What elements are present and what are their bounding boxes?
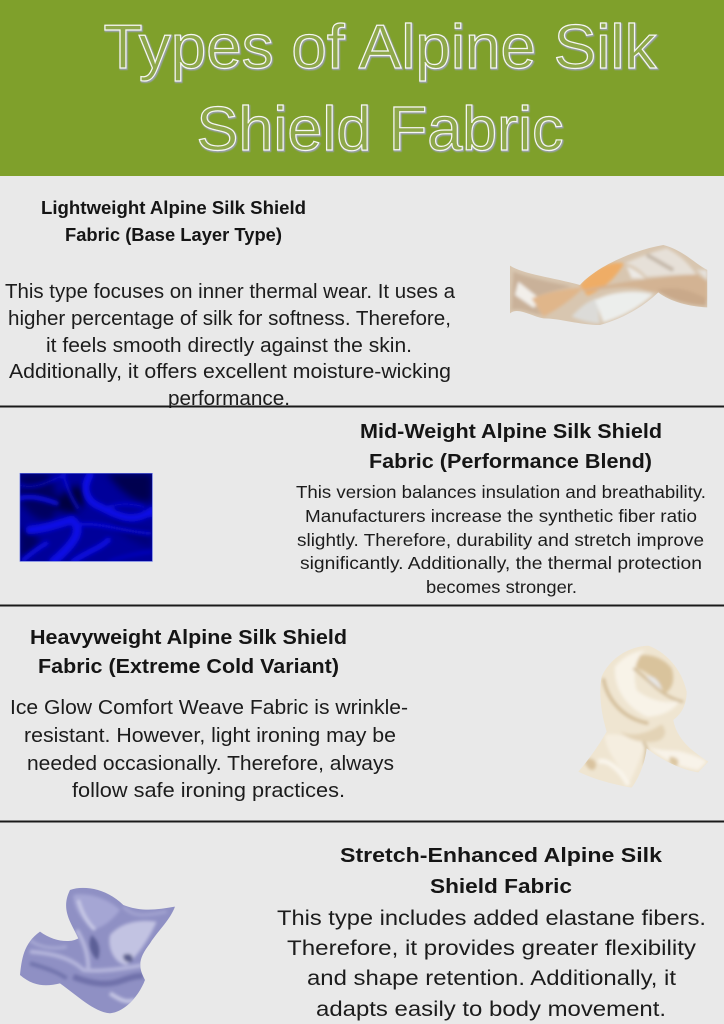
heading: stretch-enhanced: Stretch-Enhanced Alpine Silk bbox=[340, 844, 663, 867]
title: Shield Fabric bbox=[197, 96, 564, 165]
heading: heavyweight: Heavyweight Alpine Silk Shield bbox=[30, 626, 347, 649]
title: Types of Alpine Silk bbox=[104, 14, 658, 83]
panel: lightweight base layer type bbox=[5, 200, 708, 408]
text block: heavyweight description: Ice Glow Comfort Weave Fabric is wrinkle- bbox=[10, 697, 408, 719]
text block: lightweight description: Additionally, it offers excellent moisture-wicking bbox=[9, 361, 451, 383]
icon: lavender silk cloth bbox=[20, 888, 175, 1014]
text block: lightweight description: higher percentage of silk for softness. Therefore, bbox=[8, 308, 451, 330]
icon: blue satin swatch bbox=[20, 473, 152, 561]
title: Types of Alpine Silk bbox=[104, 13, 658, 82]
heading: mid-weight: Fabric (Performance Blend) bbox=[369, 450, 652, 473]
text block: mid-weight description: This version balances insulation and breathability. bbox=[296, 482, 706, 502]
header banner bbox=[0, 0, 724, 176]
text block: lightweight description: This type focuses on inner thermal wear. It uses a bbox=[5, 281, 456, 303]
panel: stretch-enhanced bbox=[20, 847, 704, 1020]
text block: lightweight description: performance. bbox=[168, 388, 290, 410]
text block: heavyweight description: needed occasionally. Therefore, always bbox=[27, 753, 394, 775]
icon: translucent silk ribbon bbox=[510, 245, 708, 325]
text block: mid-weight description bbox=[296, 482, 706, 597]
title bbox=[104, 13, 658, 165]
heading: lightweight: Fabric (Base Layer Type) bbox=[65, 224, 282, 245]
text block: lightweight description: it feels smooth directly against the skin. bbox=[46, 335, 412, 357]
text block: mid-weight description: Manufacturers increase the synthetic fiber ratio bbox=[305, 506, 697, 526]
text block: mid-weight description: significantly. Additionally, the thermal protection bbox=[300, 553, 702, 573]
text block: stretch-enhanced description: and shape retention. Additionally, it bbox=[307, 966, 676, 990]
heading: mid-weight bbox=[360, 420, 662, 473]
divider bbox=[0, 820, 724, 822]
text block: stretch-enhanced description: Therefore, it provides greater flexibility bbox=[287, 936, 696, 960]
text block: stretch-enhanced description bbox=[277, 906, 706, 1021]
heading: stretch-enhanced bbox=[340, 844, 663, 898]
text block: heavyweight description: follow safe ironing practices. bbox=[72, 780, 345, 802]
text block: lightweight description bbox=[5, 281, 456, 410]
title: Shield Fabric bbox=[196, 95, 564, 164]
heading: heavyweight bbox=[30, 626, 347, 678]
divider bbox=[0, 604, 724, 606]
text block: heavyweight description: resistant. However, light ironing may be bbox=[24, 725, 396, 747]
heading: lightweight bbox=[41, 197, 306, 245]
text block: stretch-enhanced description: This type includes added elastane fibers. bbox=[277, 906, 706, 930]
icon: cream silk scarf bbox=[578, 646, 708, 788]
heading: stretch-enhanced: Shield Fabric bbox=[430, 875, 572, 898]
heading: heavyweight: Fabric (Extreme Cold Variant) bbox=[38, 655, 339, 678]
text block: mid-weight description: becomes stronger. bbox=[426, 577, 577, 597]
heading: lightweight: Lightweight Alpine Silk Shield bbox=[41, 197, 306, 218]
panel: mid-weight performance blend bbox=[0, 408, 724, 605]
text block: mid-weight description: slightly. Therefore, durability and stretch improve bbox=[297, 530, 704, 550]
divider bbox=[0, 406, 724, 408]
text block: heavyweight description bbox=[10, 697, 408, 802]
heading: mid-weight: Mid-Weight Alpine Silk Shield bbox=[360, 420, 662, 443]
text block: stretch-enhanced description: adapts easily to body movement. bbox=[316, 997, 666, 1021]
panel: heavyweight extreme cold variant bbox=[12, 629, 708, 801]
